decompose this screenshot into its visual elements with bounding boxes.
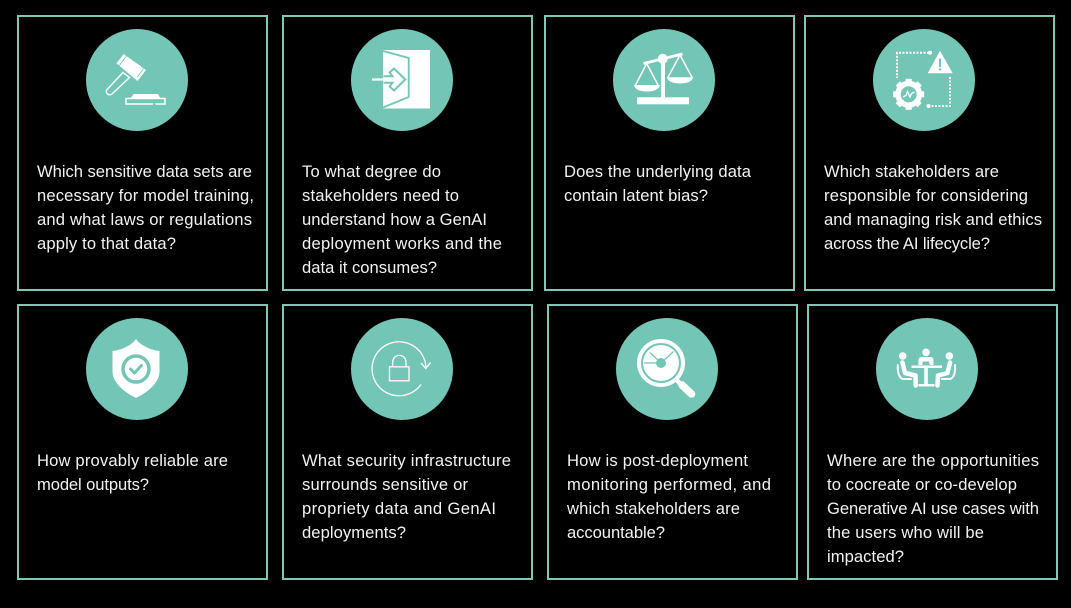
icon: risk gear and warning bbox=[873, 29, 975, 131]
panel: co-creation opportunities bbox=[808, 305, 1057, 579]
text: sensitive data sets question: necessary for model training, bbox=[37, 186, 254, 205]
text: latent bias question bbox=[564, 162, 752, 205]
text: risk and ethics question: and managing risk and ethics bbox=[824, 210, 1042, 229]
text: stakeholder understanding question: stakeholders need to bbox=[302, 186, 459, 205]
text: stakeholder understanding question: deployment works and the bbox=[302, 234, 502, 253]
text: reliable outputs question: model outputs? bbox=[37, 475, 149, 494]
panel: post-deployment monitoring bbox=[548, 305, 797, 579]
text: sensitive data sets question: apply to that data? bbox=[37, 234, 176, 253]
icon: balance scales bbox=[613, 29, 715, 131]
text: security infrastructure question bbox=[302, 451, 511, 542]
panel: sensitive data sets bbox=[18, 16, 267, 290]
text: post-deployment monitoring question bbox=[566, 451, 771, 542]
icon: lock with rotation arrow bbox=[351, 318, 453, 420]
text: post-deployment monitoring question: monitoring performed, and bbox=[567, 475, 771, 494]
panel: latent bias bbox=[545, 16, 794, 290]
text: post-deployment monitoring question: which stakeholders are bbox=[566, 499, 740, 518]
text: security infrastructure question: propriety data and GenAI bbox=[302, 499, 496, 518]
icon: gavel bbox=[86, 29, 188, 131]
text: risk and ethics question: Which stakeholders are bbox=[824, 162, 999, 181]
icon: magnifier with pie chart bbox=[616, 318, 718, 420]
text: stakeholder understanding question: understand how a GenAI bbox=[302, 210, 487, 229]
text: risk and ethics question: across the AI lifecycle? bbox=[824, 234, 990, 253]
text: reliable outputs question bbox=[37, 451, 228, 494]
panel: risk and ethics bbox=[805, 16, 1054, 290]
text: post-deployment monitoring question: accountable? bbox=[567, 523, 665, 542]
text: co-creation opportunities question: the users who will be bbox=[827, 523, 984, 542]
text: stakeholder understanding question bbox=[302, 162, 502, 277]
text: security infrastructure question: deployments? bbox=[302, 523, 406, 542]
text: risk and ethics question: responsible for considering bbox=[824, 186, 1028, 205]
text: co-creation opportunities question: to cocreate or co-develop bbox=[827, 475, 1017, 494]
text: security infrastructure question: surrounds sensitive or bbox=[302, 475, 468, 494]
text: risk and ethics question bbox=[824, 162, 1042, 253]
text: sensitive data sets question bbox=[37, 162, 254, 253]
text: co-creation opportunities question bbox=[827, 451, 1039, 566]
text: latent bias question: Does the underlying data bbox=[564, 162, 752, 181]
panel: reliable outputs bbox=[18, 305, 267, 579]
text: reliable outputs question: How provably reliable are bbox=[37, 451, 228, 470]
text: co-creation opportunities question: Generative AI use cases with bbox=[827, 499, 1039, 518]
panel: stakeholder understanding bbox=[283, 16, 532, 290]
text: stakeholder understanding question: To what degree do bbox=[302, 162, 441, 181]
text: post-deployment monitoring question: How is post-deployment bbox=[567, 451, 748, 470]
text: security infrastructure question: What security infrastructure bbox=[302, 451, 511, 470]
text: latent bias question: contain latent bias? bbox=[564, 186, 708, 205]
icon: door with arrow bbox=[351, 29, 453, 131]
panel: security infrastructure bbox=[283, 305, 532, 579]
text: co-creation opportunities question: Where are the opportunities bbox=[827, 451, 1039, 470]
text: sensitive data sets question: and what laws or regulations bbox=[37, 210, 252, 229]
text: co-creation opportunities question: impacted? bbox=[827, 547, 904, 566]
text: sensitive data sets question: Which sensitive data sets are bbox=[37, 162, 252, 181]
text: stakeholder understanding question: data it consumes? bbox=[302, 258, 437, 277]
icon: shield with check bbox=[86, 318, 188, 420]
icon: people at a meeting table bbox=[876, 318, 978, 420]
